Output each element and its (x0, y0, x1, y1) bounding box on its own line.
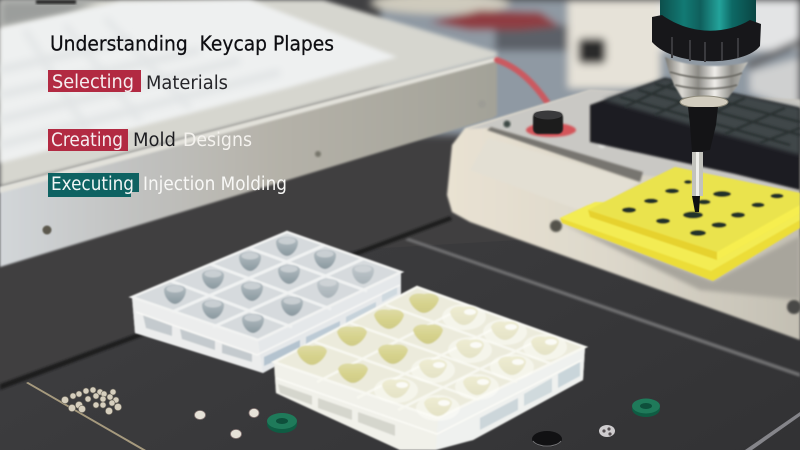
label: creating mold designs: Designs (183, 130, 252, 151)
black collar (652, 15, 761, 61)
keycap mold: resin filled (274, 287, 585, 450)
device top surface (0, 0, 497, 187)
label: selecting materials: Selecting (52, 72, 134, 93)
silver beads cluster (61, 387, 122, 415)
blurred background equipment (370, 0, 800, 135)
text block (48, 32, 334, 197)
mold side walls (274, 347, 585, 450)
keycap mold: clear (132, 232, 401, 373)
drill head (652, 0, 761, 212)
mold grid (171, 245, 367, 327)
grey bumps (164, 237, 374, 333)
base top face (467, 90, 800, 190)
base plate (560, 205, 800, 281)
small metal part (599, 425, 615, 437)
steel needle (692, 152, 703, 196)
upper plate (588, 167, 800, 260)
white machine base (447, 90, 800, 340)
red cable (497, 60, 547, 102)
label: executing injection molding: Injection Molding (143, 174, 287, 195)
keyboard plate (0, 0, 397, 163)
chrome chuck (665, 57, 748, 98)
knob with red ring (526, 110, 576, 137)
device screw (42, 226, 52, 234)
table hole (532, 431, 562, 447)
dark keypad tray (590, 78, 800, 190)
label: creating mold designs (48, 129, 252, 151)
label: creating mold designs: Creating (51, 130, 123, 151)
base bolt (550, 220, 562, 232)
label: executing injection molding (48, 173, 287, 197)
grey device with keyboard plate (0, 0, 497, 267)
black holder (688, 107, 718, 152)
silver beads loose (194, 408, 259, 438)
label: selecting materials (48, 70, 228, 94)
control slot bar (487, 127, 643, 182)
label: creating mold designs: Mold (133, 130, 176, 151)
device front face (0, 57, 497, 267)
mold holes (622, 180, 784, 236)
label: selecting materials: Materials (146, 73, 228, 94)
yellow plate (560, 167, 800, 281)
base shadow under plate (560, 222, 800, 300)
mold side walls (132, 272, 401, 373)
teal cylinder (660, 0, 756, 33)
green washer right (632, 398, 660, 417)
label: executing injection molding: Executing (51, 174, 134, 195)
title: Understanding Keycap Plapes (50, 32, 334, 56)
green washer left (267, 413, 297, 433)
base body (447, 90, 800, 340)
resin bumps (297, 294, 567, 421)
mold grid (312, 305, 552, 410)
